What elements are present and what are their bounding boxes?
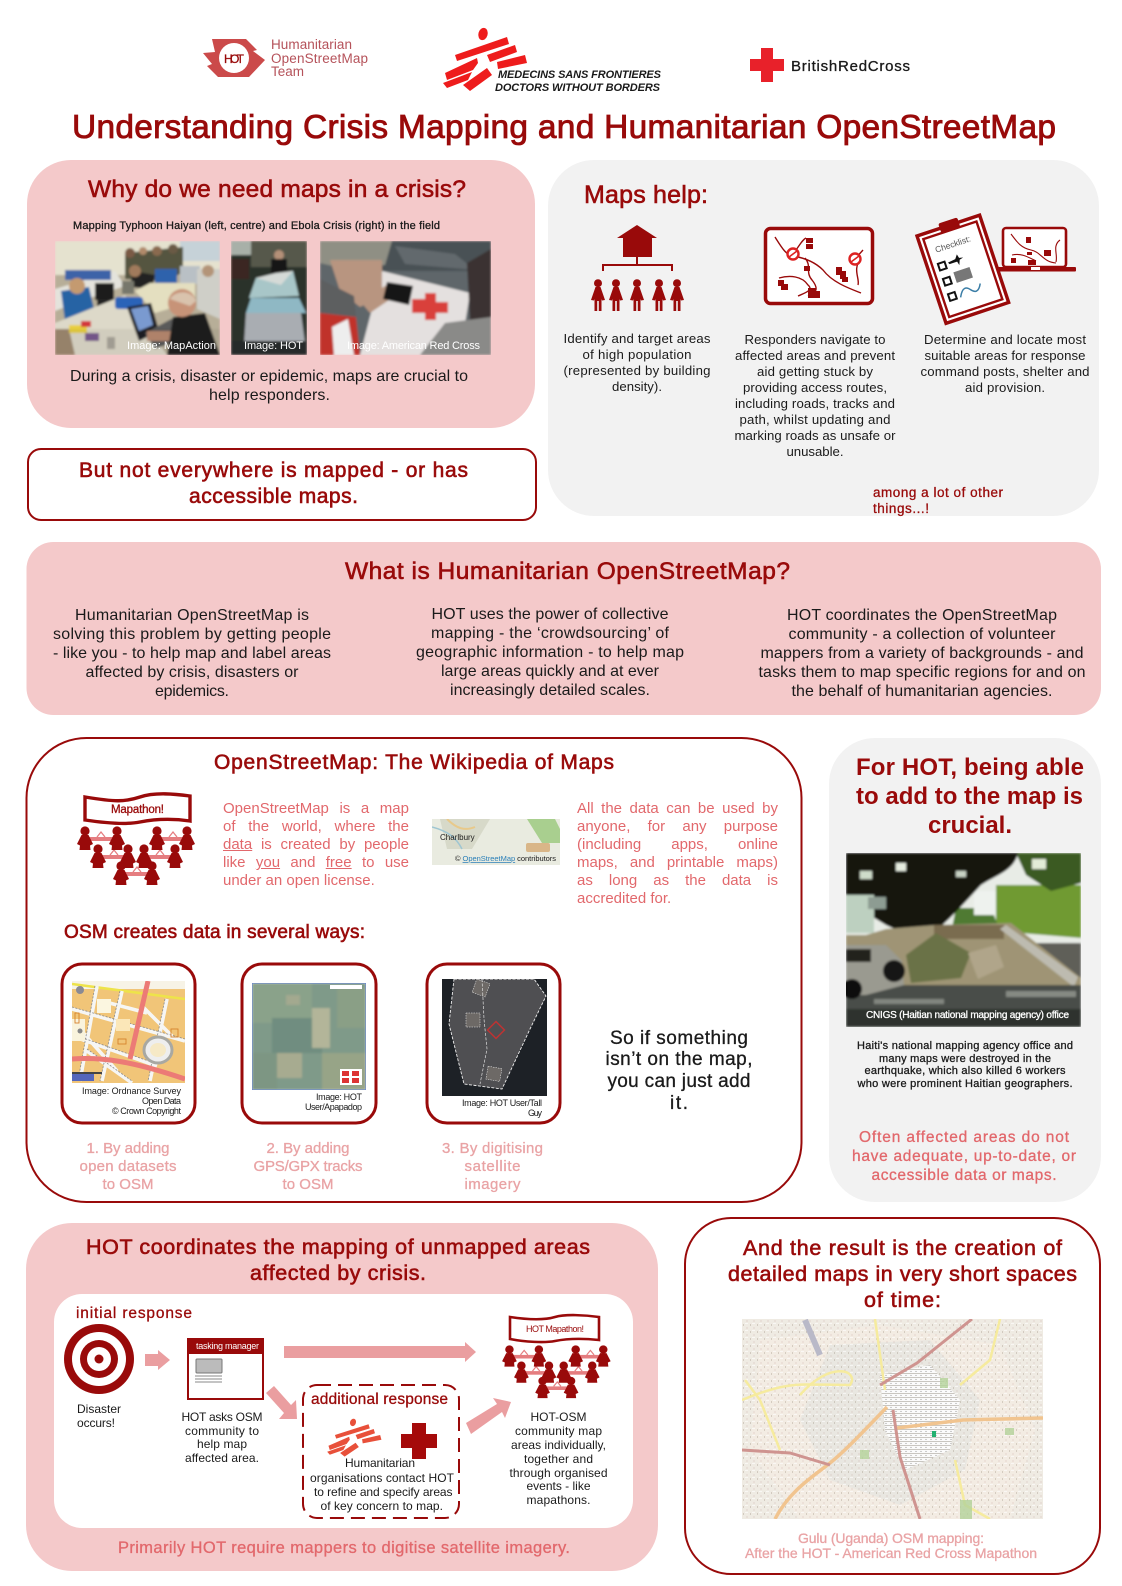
map caption: Gulu (Uganda) OSM mapping: (798, 1530, 984, 1546)
text: Haiti mapping agency destroyed: who were prominent Haitian geographers. (856, 1078, 1072, 1090)
map caption (745, 1530, 1037, 1561)
map caption: After the HOT - American Red Cross Mapathon (745, 1545, 1037, 1561)
text: coordinates community: tasks them to map specific regions for and on (758, 664, 1086, 681)
text: all the data: anyone, for any purpose (577, 818, 778, 835)
icon: MSF mini (327, 1418, 381, 1457)
text: Haiti mapping agency destroyed: many maps were destroyed in the (879, 1053, 1051, 1065)
panel: result detailed maps (685, 1218, 1100, 1574)
icon: tasking manager (187, 1338, 264, 1399)
image: Ordnance Survey map (72, 981, 185, 1083)
logo: Humanitarian OpenStreetMap Team (203, 37, 368, 79)
text: OSM is a map: OpenStreetMap is a map (223, 800, 409, 817)
image credit: © Crown Copyright (112, 1106, 181, 1116)
note: among a lot of other things: things...! (873, 501, 929, 516)
heading: OSM creates data: OSM creates data in several ways: (64, 922, 365, 943)
text: maps are crucial: During a crisis, disaster or epidemic, maps are crucial to (70, 368, 468, 385)
label: method 3: imagery (464, 1176, 521, 1193)
callout: just add it: So if something (610, 1028, 748, 1049)
text: responders navigate: Responders navigate to (744, 332, 886, 347)
icon: target (64, 1324, 134, 1394)
icon: clipboard checklist (915, 210, 1009, 323)
text: determine and locate: aid provision. (965, 380, 1045, 395)
callout: just add it (606, 1028, 752, 1114)
icon: red cross (401, 1423, 437, 1459)
text: solving this problem: solving this problem by getting people (53, 626, 331, 643)
text: determine and locate: command posts, shelter and (920, 364, 1090, 379)
text: identify high population (564, 331, 711, 394)
heading: wikipedia of maps: OpenStreetMap: The Wikipedia of Maps (214, 751, 614, 774)
callout: just add it: isn’t on the map, (606, 1049, 752, 1070)
note: digitise satellite imagery: Primarily HOT require mappers to digitise satellite imagery. (118, 1539, 570, 1557)
icon: mapathon group (77, 794, 195, 885)
heading: crucial: For HOT, being able (856, 754, 1084, 781)
title: Understanding Crisis Mapping and Humanitarian OpenStreetMap (72, 109, 1056, 146)
text: disaster occurs (77, 1402, 121, 1430)
logo: Medecins Sans Frontieres: MEDECINS SANS FRONTIERES (498, 69, 662, 81)
label: method 2: 2. By adding (266, 1140, 350, 1157)
icon: road map (766, 228, 872, 304)
heading: result: detailed maps in very short spaces (728, 1262, 1077, 1286)
text: crowdsourcing: geographic information - to help map (416, 644, 684, 661)
card 2: GPS tracks (242, 964, 376, 1123)
text: coordinates community: community - a collection of volunteer (788, 626, 1056, 643)
icon: clipboard checklist: Checklist: (934, 234, 972, 255)
photo credits: Image: HOT (244, 340, 303, 352)
label: method 1 (80, 1140, 176, 1193)
text: responders navigate: including roads, tracks and (735, 396, 895, 411)
text: all the data: (including apps, online (577, 836, 778, 853)
heading: crucial: crucial. (928, 812, 1012, 839)
text: identify high population: of high population (582, 347, 692, 362)
logo: Humanitarian OpenStreetMap Team: Team (271, 64, 304, 79)
label: method 1: 1. By adding (86, 1140, 170, 1157)
text: solving this problem (53, 607, 331, 700)
icon: mapathon group: Mapathon! (111, 804, 164, 816)
text: solving this problem: - like you - to help map and label areas (53, 645, 331, 662)
heading: HOT coordinates (86, 1235, 590, 1285)
heading: result (728, 1236, 1077, 1312)
note: among a lot of other things (873, 485, 1004, 516)
photo caption heading: Mapping Typhoon Haiyan (left, centre) and Ebola Crisis (right) in the field (73, 220, 440, 232)
text: identify high population: Identify and target areas (564, 331, 711, 346)
text: community map areas: HOT-OSM (530, 1410, 586, 1424)
text: coordinates community (758, 607, 1086, 700)
text: coordinates community: HOT coordinates the OpenStreetMap (787, 607, 1057, 624)
map: Gulu Uganda (742, 1319, 1043, 1519)
text: HOT asks OSM: help map (197, 1437, 247, 1451)
text: Haiti mapping agency destroyed (856, 1040, 1073, 1090)
text: coordinates community: mappers from a variety of backgrounds - and (760, 645, 1084, 662)
image credit: Open Data (142, 1096, 181, 1106)
heading: crucial: to add to the map is (856, 783, 1083, 810)
panel: OpenStreetMap wikipedia of maps (26, 738, 802, 1202)
heading: HOT coordinates: affected by crisis. (250, 1261, 426, 1285)
photo credits: Image: MapAction (127, 340, 216, 352)
label: method 2 (254, 1140, 362, 1193)
text: affected areas lack data: accessible data or maps. (872, 1167, 1056, 1184)
text: community map areas: community map (515, 1424, 602, 1438)
heading: maps help: Maps help: (584, 181, 708, 209)
image credit: Image: HOT (316, 1092, 362, 1102)
card 1: open datasets (62, 964, 195, 1123)
logo: Humanitarian OpenStreetMap Team: HOT (224, 52, 245, 66)
text: responders navigate: affected areas and prevent (735, 348, 895, 363)
label: method 2: to OSM (282, 1176, 334, 1193)
text: determine and locate: Determine and locate most (924, 332, 1086, 347)
image: GPS traces on imagery (252, 983, 366, 1090)
text: community map areas: together and (524, 1452, 593, 1466)
text: responders navigate: aid getting stuck by (757, 364, 873, 379)
text: responders navigate: providing access routes, (743, 380, 887, 395)
heading: crucial (856, 754, 1084, 839)
text: disaster occurs: Disaster (77, 1402, 121, 1416)
panel: add to the map is crucial (829, 738, 1101, 1202)
arrow: disaster to tasking manager (145, 1350, 170, 1370)
text: responders navigate: path, whilst updating and (740, 412, 890, 427)
text: crowdsourcing (416, 606, 684, 699)
icon: house and people (591, 225, 684, 311)
image credit: Image: Ordnance Survey (82, 1086, 182, 1096)
logo: British Red Cross: BritishRedCross (791, 58, 910, 75)
callout: just add it: you can just add (608, 1071, 750, 1092)
workflow diagram (54, 1294, 633, 1528)
photo credits (127, 340, 480, 352)
callout: not everywhere is mapped: But not everywhere is mapped - or has (79, 459, 468, 482)
text: community map areas: events - like (526, 1479, 591, 1493)
icon: HOT mapathon (502, 1315, 611, 1398)
note: among a lot of other things: among a lot of other (873, 485, 1004, 500)
text: coordinates community: the behalf of humanitarian agencies. (792, 683, 1052, 700)
text: community map areas: mapathons. (526, 1493, 590, 1507)
image: small OSM map: © OpenStreetMap contributors (455, 854, 556, 863)
text: all the data: as long as the data is (577, 872, 778, 889)
callout: not everywhere is mapped: accessible maps. (189, 485, 358, 508)
text: disaster occurs: occurs! (77, 1416, 115, 1430)
text: community map areas (510, 1410, 608, 1507)
image credit: Image: HOT User/Tall (462, 1098, 542, 1108)
text: determine and locate (920, 332, 1090, 395)
heading: HOT coordinates: HOT coordinates the mapping of unmapped areas (86, 1235, 590, 1259)
text: all the data (577, 800, 778, 910)
text: crowdsourcing: HOT uses the power of collective (432, 606, 669, 623)
heading: why maps: Why do we need maps in a crisis? (88, 176, 466, 203)
text: determine and locate: suitable areas for response (924, 348, 1086, 363)
label: method 3: 3. By digitising (442, 1140, 543, 1157)
text: all the data: All the data can be used by (577, 800, 778, 817)
label: initial response: initial response (76, 1305, 192, 1322)
label: method 1: to OSM (102, 1176, 154, 1193)
photo: American Red Cross (320, 241, 491, 355)
text: Haiti mapping agency destroyed: Haiti's national mapping agency office and (857, 1040, 1073, 1052)
heading: result: of time: (864, 1288, 941, 1312)
text: Haiti mapping agency destroyed: earthquake, which also killed 6 workers (864, 1065, 1066, 1077)
arrow: to community (466, 1398, 511, 1434)
label: method 3 (442, 1140, 543, 1193)
arrow: to additional response (266, 1386, 297, 1419)
text: humanitarian organisations (310, 1456, 455, 1513)
text: maps are crucial: help responders. (209, 387, 330, 404)
text: solving this problem: Humanitarian OpenStreetMap is (75, 607, 309, 624)
panel: why do we need maps (27, 160, 535, 428)
box: additional response (303, 1385, 459, 1518)
text: humanitarian organisations: Humanitarian (345, 1456, 415, 1470)
image: satellite digitising (442, 979, 547, 1096)
image credit (462, 1098, 542, 1118)
text: affected areas lack data: Often affected areas do not (859, 1129, 1070, 1146)
text: OSM is a map: of the world, where the (223, 818, 409, 835)
text: HOT asks OSM: affected area. (185, 1451, 259, 1465)
text: all the data: maps, and printable maps) (577, 854, 778, 871)
text: identify high population: density). (612, 379, 662, 394)
panel: HOT coordinates mapping (26, 1223, 658, 1571)
text: community map areas: areas individually, (511, 1438, 606, 1452)
photo: MapAction (55, 241, 220, 355)
heading: result: And the result is the creation of (743, 1236, 1062, 1260)
logo: Medecins Sans Frontieres (443, 27, 662, 94)
text: maps are crucial (70, 368, 468, 404)
callout: not everywhere is mapped (28, 449, 536, 520)
text: humanitarian organisations: to refine and specify areas (314, 1485, 452, 1499)
text: affected areas lack data: have adequate, up-to-date, or (852, 1148, 1076, 1165)
text: identify high population: (represented by building (564, 363, 710, 378)
text: responders navigate: marking roads as unsafe or (734, 428, 896, 443)
text: humanitarian organisations: organisations contact HOT (310, 1471, 455, 1485)
text: affected areas lack data (852, 1129, 1076, 1184)
image credit (82, 1086, 182, 1116)
text: HOT asks OSM: community to (185, 1424, 259, 1438)
photo credits: Image: American Red Cross (347, 340, 480, 352)
text: OSM is a map: like you and free to use (223, 854, 409, 871)
arrow: to mapathon (284, 1342, 476, 1362)
text: crowdsourcing: mapping - the ‘crowdsourcing’ of (431, 625, 670, 642)
logo: Humanitarian OpenStreetMap Team: Humanitarian (271, 37, 352, 52)
icon: HOT mapathon: HOT Mapathon! (526, 1324, 584, 1334)
text: community map areas: through organised (510, 1466, 608, 1480)
text: OSM is a map (223, 800, 409, 892)
heading: what is HOT: What is Humanitarian OpenStreetMap? (345, 558, 790, 585)
callout: just add it: it. (670, 1093, 688, 1114)
image credit: User/Apapadop (305, 1102, 362, 1112)
image: small OSM map (432, 819, 560, 865)
image: small OSM map: Charlbury (440, 833, 475, 842)
text: responders navigate: unusable. (786, 444, 844, 459)
logo: Humanitarian OpenStreetMap Team: OpenStreetMap (271, 51, 368, 66)
text: all the data: accredited for. (577, 890, 671, 907)
logo: Medecins Sans Frontieres: DOCTORS WITHOUT BORDERS (495, 82, 661, 94)
photo: HOT maps on floor (231, 241, 307, 355)
text: solving this problem: epidemics. (155, 683, 229, 700)
card 3: digitising imagery (427, 964, 560, 1123)
label: method 2: GPS/GPX tracks (254, 1158, 362, 1175)
text: responders navigate (734, 332, 896, 459)
text: OSM is a map: data is created by people (223, 836, 409, 853)
panel: maps help (548, 160, 1099, 516)
photo caption: CNIGS (Haitian national mapping agency) office (866, 1010, 1069, 1021)
text: OSM is a map: under an open license. (223, 872, 375, 889)
icon: laptop map (997, 228, 1076, 272)
label: method 1: open datasets (80, 1158, 176, 1175)
logo: British Red Cross (750, 48, 910, 82)
panel: what is HOT (26, 542, 1101, 715)
icon: tasking manager: tasking manager (196, 1341, 259, 1351)
image credit (305, 1092, 362, 1112)
text: crowdsourcing: increasingly detailed scales. (450, 682, 650, 699)
label: method 3: satellite (464, 1158, 520, 1175)
text: humanitarian organisations: of key concern to map. (320, 1499, 443, 1513)
text: crowdsourcing: large areas quickly and at ever (441, 663, 660, 680)
photo: collapsed CNIGS office (846, 853, 1081, 1027)
text: HOT asks OSM (182, 1410, 262, 1465)
text: solving this problem: affected by crisis, disasters or (86, 664, 299, 681)
box: additional response: additional response (311, 1391, 448, 1408)
text: HOT asks OSM: HOT asks OSM (182, 1410, 262, 1424)
image credit: Guy (528, 1108, 542, 1118)
